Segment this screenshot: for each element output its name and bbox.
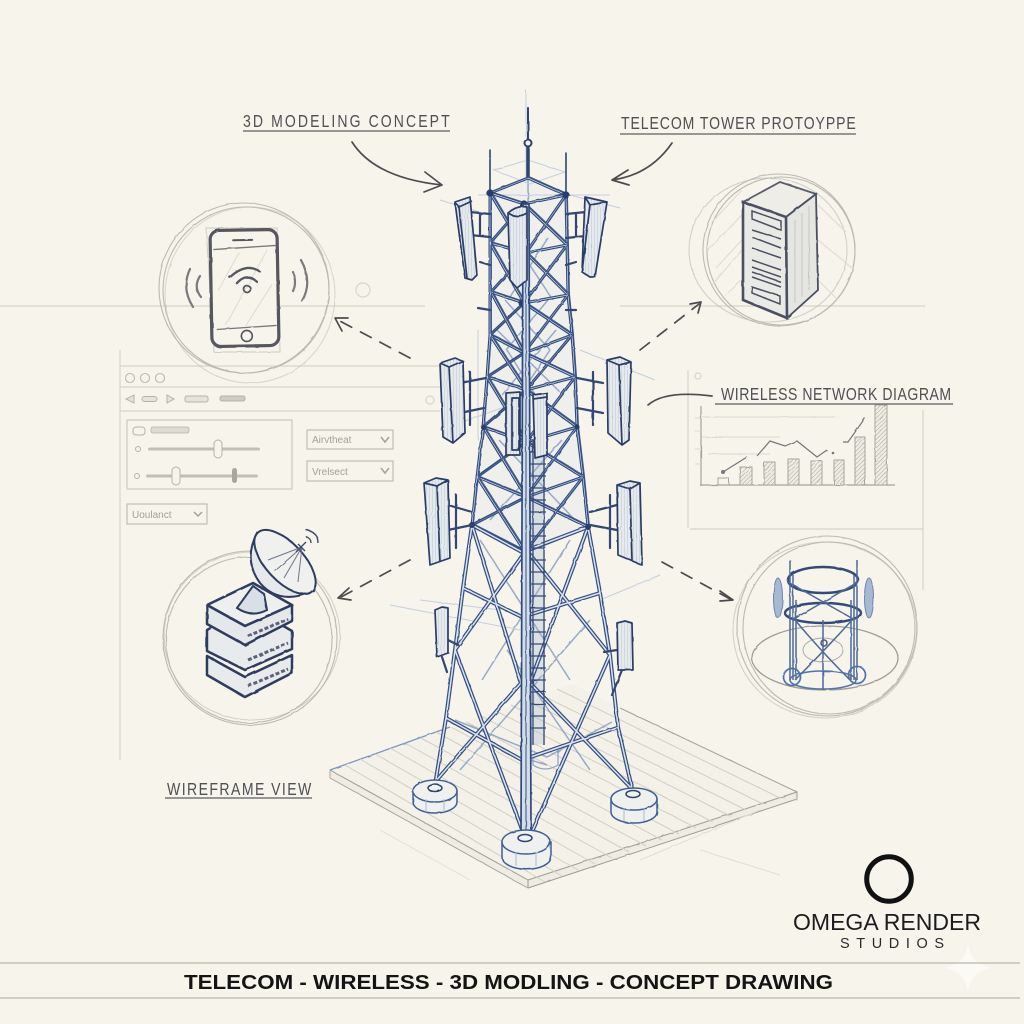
back lattice (455, 178, 612, 770)
antenna: middle left (440, 358, 465, 443)
antenna: upper right (582, 197, 607, 277)
icon: tower wireframe top view in circle (733, 536, 917, 718)
construction guide lines (0, 283, 925, 760)
label: wireframe view: WIREFRAME VIEW (167, 779, 312, 799)
ladder (530, 440, 546, 745)
upper lattice frame (472, 177, 590, 552)
antenna: upper left (455, 197, 477, 280)
spire and mast (490, 108, 566, 195)
footer title: TELECOM - WIRELESS - 3D MODLING - CONCEPT DRAWING (184, 971, 833, 994)
box labels (248, 619, 288, 686)
dashed arrow: to wireframe detail (662, 562, 733, 601)
joint nodes (469, 189, 591, 556)
dropdown: Airvtheat: Airvtheat (312, 435, 352, 446)
arrow: telecom tower curved (612, 143, 672, 185)
antenna: lower left (424, 478, 450, 565)
antenna: bottom left (435, 607, 448, 657)
middle box (207, 623, 292, 670)
concrete footing: right (611, 788, 657, 823)
dashed arrow: to server (640, 302, 701, 350)
bar and line chart (695, 405, 895, 486)
central mast leg (521, 204, 531, 838)
ladder shading (530, 440, 545, 745)
top box (207, 583, 292, 626)
concrete platform with planks (330, 684, 797, 888)
logo: Omega Render Studios (793, 857, 981, 952)
icon: satellite dish on stacked boxes in circle (163, 520, 340, 725)
concrete footing: front (502, 830, 551, 869)
dropdown: Airvtheat (307, 430, 393, 449)
logo name: OMEGA RENDER (793, 909, 981, 935)
antenna: lower right (617, 481, 642, 565)
logo subtitle: STUDIOS (840, 936, 944, 952)
antenna: upper centre (508, 207, 527, 288)
software window panel (126, 374, 393, 524)
arrow: 3D modeling curved (352, 142, 442, 192)
guide sketch lines (390, 90, 660, 630)
footer rules (0, 963, 1020, 998)
label: 3D modeling concept: 3D MODELING CONCEPT (243, 111, 450, 131)
dropdown: Uoulanct: Uoulanct (132, 510, 172, 521)
bottom box (207, 655, 292, 697)
dashed arrow: to smartphone (335, 318, 410, 358)
logo ring (867, 857, 911, 901)
window control buttons (126, 374, 164, 382)
icon: server rack in circle (689, 174, 855, 326)
slider panel (127, 420, 292, 489)
concrete footing: left (413, 780, 457, 813)
label: wireless network diagram: WIRELESS NETWORK DIAGRAM (721, 384, 951, 404)
antenna arms (442, 212, 622, 695)
dropdown: Uoulanct (127, 504, 207, 524)
antenna: middle centre left (506, 392, 520, 455)
dish bowl (251, 533, 313, 597)
sparkle watermark (944, 944, 992, 992)
dropdown: Vrelsect: Vrelsect (312, 467, 348, 478)
dish neck (237, 586, 267, 614)
dish feed and signal (296, 530, 318, 552)
back footing (533, 750, 558, 769)
tower body shading (472, 178, 588, 552)
connector: wireless network (648, 394, 712, 405)
dashed arrow: to satellite dish (338, 560, 410, 600)
antenna: middle right (607, 357, 631, 445)
lower lattice frame (435, 525, 633, 832)
dish rim (244, 520, 326, 604)
label: telecom tower prototype: TELECOM TOWER PROTOYPPE (621, 113, 856, 133)
toolbar icons (126, 395, 245, 403)
icon: smartphone with wifi in circle (159, 203, 335, 383)
telecom tower (390, 90, 660, 869)
antenna: bottom right (617, 621, 633, 670)
antenna: middle centre right (533, 393, 547, 458)
dropdown: Vrelsect (307, 461, 393, 481)
